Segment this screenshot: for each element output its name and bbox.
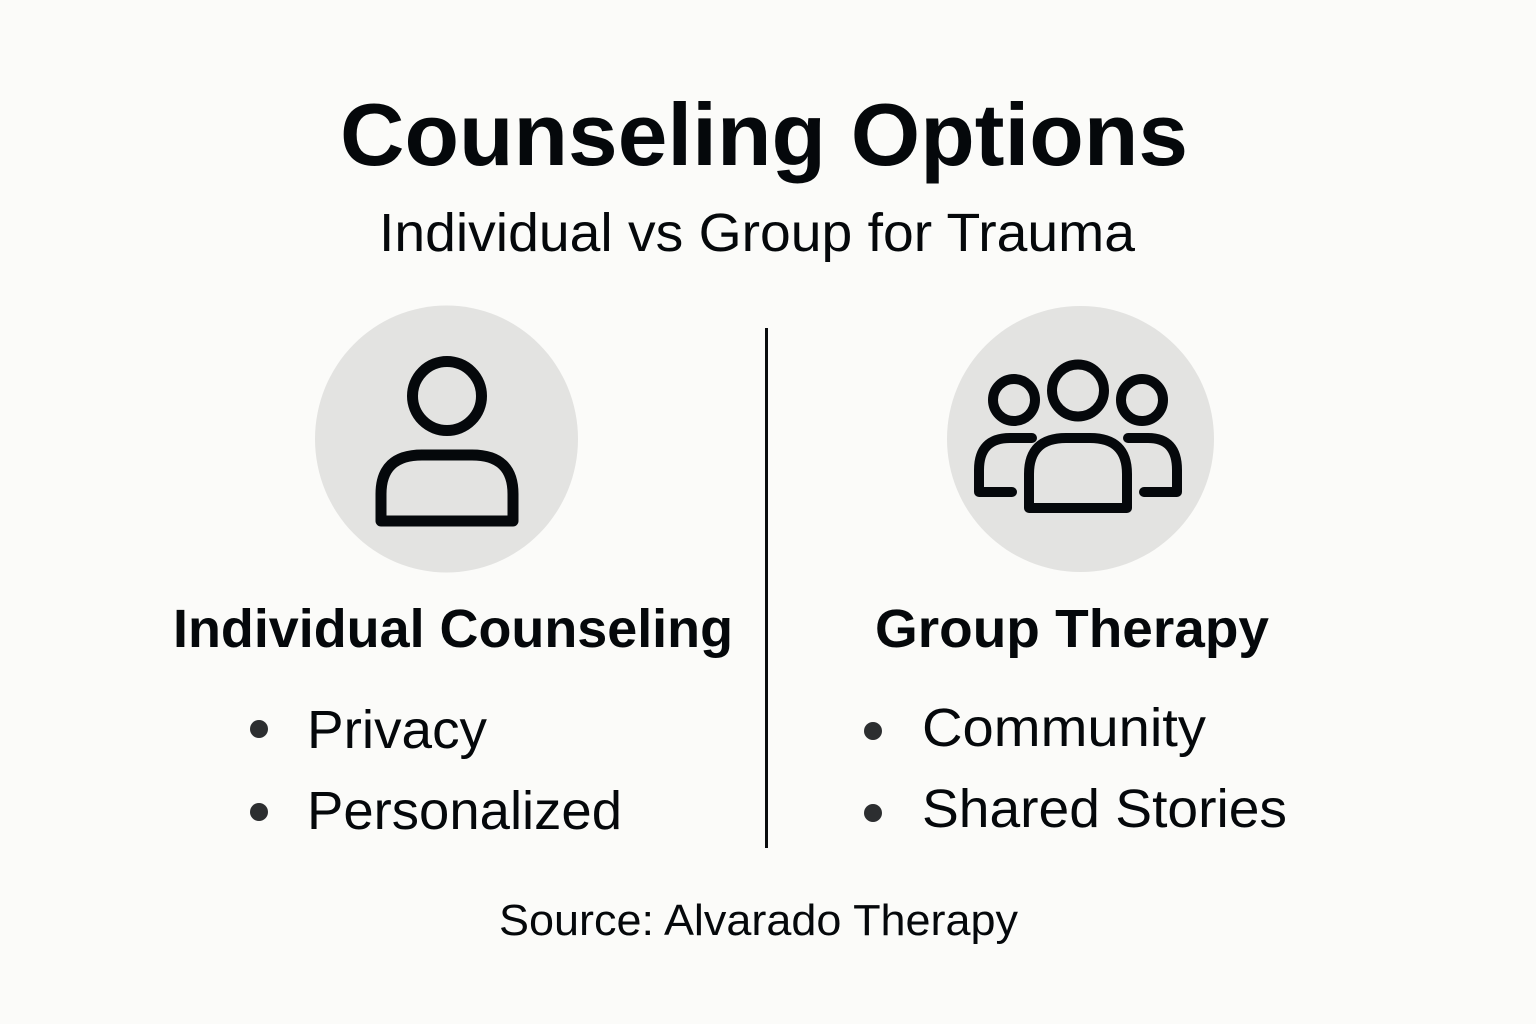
heading: individual counseling: Individual Counseling [173, 599, 733, 659]
icon: group of people [947, 306, 1214, 572]
list: individual benefits: Privacy [307, 700, 487, 760]
list: group benefits [864, 698, 1287, 839]
list: individual benefits: Personalized [307, 781, 622, 841]
title: Counseling Options [340, 85, 1188, 184]
panel: group therapy [864, 306, 1287, 839]
list: group benefits: Shared Stories [922, 779, 1287, 839]
heading: group therapy: Group Therapy [875, 599, 1269, 659]
panel: individual counseling [173, 306, 733, 841]
list: individual benefits [250, 700, 622, 841]
icon: single person [315, 306, 578, 572]
center divider [765, 328, 768, 848]
source note: Source: Alvarado Therapy [499, 896, 1018, 945]
list: group benefits: Community [922, 698, 1206, 758]
subtitle: Individual vs Group for Trauma [379, 203, 1136, 263]
